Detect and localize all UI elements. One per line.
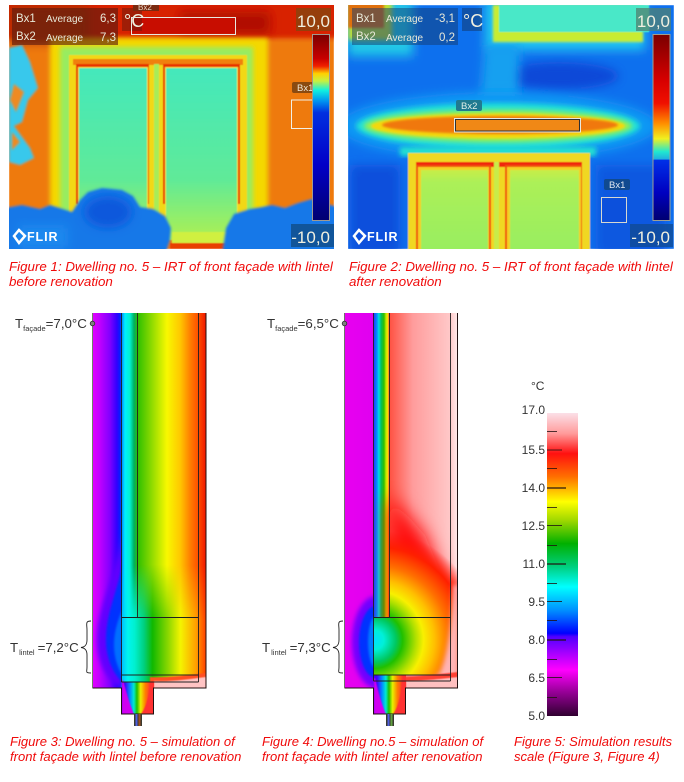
- scale labels: 6.5: [528, 671, 545, 685]
- caption: figure 4: front façade with lintel after renovation: [262, 749, 482, 764]
- label overlay Bx1 Bx2 readings: Bx2: [16, 31, 36, 43]
- window panes: [79, 68, 237, 240]
- panel: figure 2 thermal image after renovation: [338, 0, 674, 255]
- wall outline: [344, 313, 458, 714]
- panel: figure 3 simulation before renovation: [92, 313, 206, 726]
- temperature scale bar: -10,0: [291, 228, 330, 247]
- plants: [5, 188, 340, 255]
- label: facade temperature fig 3: T: [15, 316, 23, 331]
- temperature scale bar: -10,0: [631, 228, 670, 247]
- label overlay Bx1 Bx2 readings: 6,3: [100, 13, 116, 25]
- window frame: [69, 55, 247, 227]
- panel: figure 1 thermal image before renovation: [0, 0, 345, 255]
- colour bar: [547, 413, 578, 716]
- label: lintel temperature fig 4: [262, 621, 343, 673]
- label: facade temperature fig 4: =6,5°C: [298, 316, 339, 331]
- measurement box Bx1: Bx1: [609, 180, 625, 191]
- label: facade temperature fig 3: façade: [23, 324, 46, 333]
- label overlay Bx1 Bx2 readings: Average: [386, 14, 424, 25]
- measurement box Bx2: [132, 3, 236, 34]
- lintel heat field: [122, 568, 206, 682]
- label overlay Bx1 Bx2 readings: Bx1: [16, 13, 36, 25]
- label: lintel temperature fig 4: lintel: [271, 648, 287, 657]
- scale unit: °C: [531, 379, 545, 393]
- label overlay Bx1 Bx2 readings: Average: [46, 33, 84, 44]
- window sill detail: [386, 714, 394, 726]
- scale labels: 8.0: [528, 633, 545, 647]
- label overlay Bx1 Bx2 readings: 0,2: [439, 32, 455, 44]
- caption: figure 5: scale (Figure 3, Figure 4): [514, 749, 660, 764]
- scale labels: [522, 403, 545, 723]
- label overlay Bx1 Bx2 readings: -3,1: [435, 13, 455, 25]
- measurement box Bx2: Bx2: [461, 101, 477, 112]
- scale labels: 12.5: [522, 519, 545, 533]
- temperature scale bar: 10,0: [297, 12, 330, 31]
- window sill detail: [134, 714, 142, 726]
- label overlay Bx1 Bx2 readings: °C: [463, 11, 483, 31]
- label overlay Bx1 Bx2 readings: Bx2: [356, 31, 376, 43]
- label: facade temperature fig 3: =7,0°C: [46, 316, 87, 331]
- caption: figure 1: before renovation: [9, 274, 113, 289]
- caption: figure 3: Figure 3: Dwelling no. 5 – simulation of: [10, 734, 235, 749]
- upper window: [493, 5, 649, 42]
- caption: figure 2: Figure 2: Dwelling no. 5 – IRT of front façade with lintel: [349, 259, 673, 274]
- label: facade temperature fig 4: [267, 316, 347, 333]
- panel: figure 5 colour scale: [522, 379, 578, 723]
- scale labels: 14.0: [522, 481, 545, 495]
- label overlay Bx1 Bx2 readings: Average: [46, 14, 84, 25]
- label: lintel temperature fig 3: [10, 621, 91, 673]
- temperature scale bar: [291, 8, 334, 247]
- measurement box Bx2: [454, 100, 580, 132]
- label: facade temperature fig 4: T: [267, 316, 275, 331]
- window head stem field: [122, 680, 154, 714]
- scale labels: 11.0: [523, 557, 545, 571]
- label: facade temperature fig 3: [15, 316, 95, 333]
- caption: figure 2: after renovation: [349, 274, 442, 289]
- label: facade temperature fig 4: façade: [275, 324, 298, 333]
- caption: figure 4: Figure 4: Dwelling no.5 – simulation of: [262, 734, 483, 749]
- window head stem field: [374, 675, 406, 714]
- label: lintel temperature fig 3: lintel: [19, 648, 35, 657]
- label overlay Bx1 Bx2 readings: Average: [386, 33, 424, 44]
- wall outline: [92, 313, 206, 714]
- caption: figure 3: front façade with lintel before renovation: [10, 749, 241, 764]
- label: lintel temperature fig 3: T: [10, 640, 18, 655]
- label: lintel temperature fig 3: =7,2°C: [38, 640, 79, 655]
- label overlay Bx1 Bx2 readings: 7,3: [100, 32, 116, 44]
- FLIR logo: FLIR: [367, 230, 398, 244]
- warm lintel band: [338, 92, 658, 160]
- measurement box Bx2: Bx2: [138, 3, 152, 12]
- temperature scale bar: [630, 8, 673, 247]
- scale labels: 17.0: [522, 403, 545, 417]
- lower window: [408, 153, 590, 255]
- scale ticks: [547, 432, 566, 698]
- panel: figure 4 simulation after renovation: [344, 313, 458, 726]
- FLIR logo: FLIR: [27, 230, 58, 244]
- lintel heat dome: [374, 535, 457, 674]
- label overlay Bx1 Bx2 readings: Bx1: [356, 13, 376, 25]
- measurement box Bx1: Bx1: [297, 83, 313, 94]
- scale labels: 5.0: [528, 709, 545, 723]
- measurement box Bx1: [292, 82, 316, 128]
- label overlay Bx1 Bx2 readings: [12, 8, 144, 45]
- caption: figure 1: Figure 1: Dwelling no. 5 – IRT of front façade with lintel: [9, 259, 333, 274]
- caption: figure 5: Figure 5: Simulation results: [514, 734, 672, 749]
- measurement box Bx1: [602, 179, 630, 222]
- label: lintel temperature fig 4: T: [262, 640, 270, 655]
- label overlay Bx1 Bx2 readings: °C: [124, 11, 144, 31]
- label overlay Bx1 Bx2 readings: [352, 8, 483, 45]
- scale labels: 9.5: [528, 595, 545, 609]
- label: lintel temperature fig 4: =7,3°C: [290, 640, 331, 655]
- scale labels: 15.5: [522, 443, 545, 457]
- temperature scale bar: 10,0: [637, 12, 670, 31]
